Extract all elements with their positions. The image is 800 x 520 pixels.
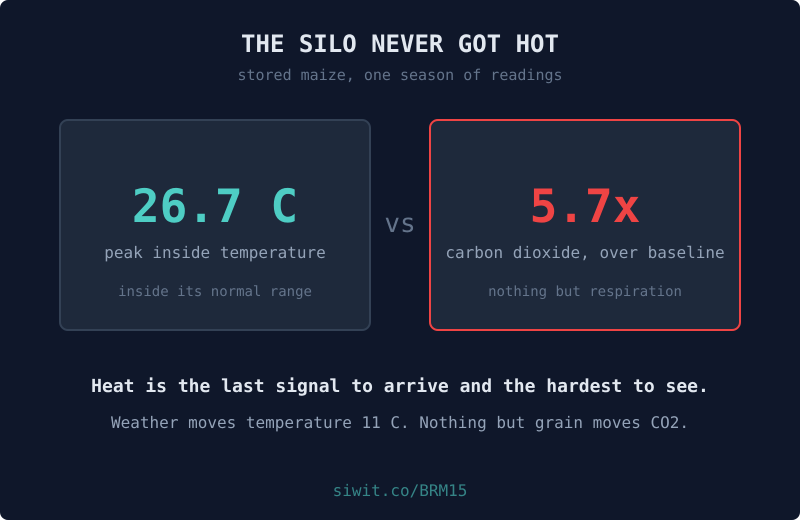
vs label: vs [384, 209, 416, 239]
CO2 note: nothing but respiration [488, 284, 682, 300]
conclusion statement: Heat is the last signal to arrive and the hardest to see. [91, 376, 709, 397]
subtitle: stored maize, one season of readings [237, 66, 563, 84]
panel: temperature [60, 120, 370, 330]
CO2 label: carbon dioxide, over baseline [445, 243, 725, 262]
CO2 value: 5.7x [530, 179, 640, 233]
source link: siwit.co/BRM15 [333, 481, 467, 500]
supporting line: Weather moves temperature 11 C. Nothing but grain moves CO2. [111, 413, 689, 432]
temperature value: 26.7 C [132, 179, 298, 233]
panel: carbon dioxide [430, 120, 740, 330]
temperature label: peak inside temperature [104, 243, 326, 262]
title: THE SILO NEVER GOT HOT [241, 30, 559, 58]
temperature note: inside its normal range [118, 284, 312, 300]
panel background [60, 120, 370, 330]
panel background [430, 120, 740, 330]
